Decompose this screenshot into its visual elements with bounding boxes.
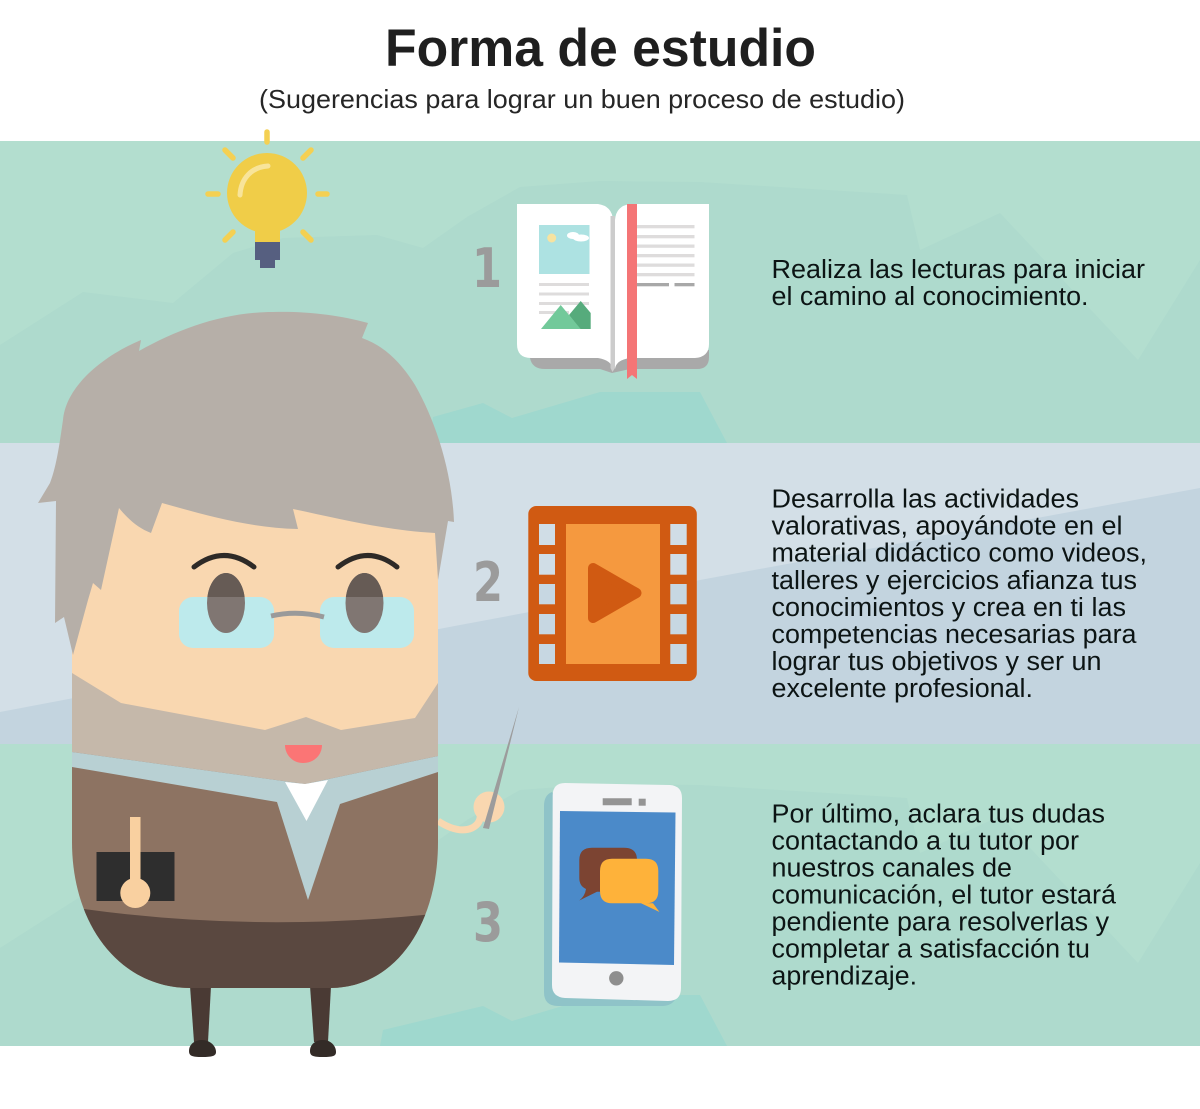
number 2: 2 xyxy=(473,551,503,614)
panel: band 1 background xyxy=(0,141,1200,443)
legs and shoes xyxy=(189,986,336,1057)
chat bubbles xyxy=(579,848,660,912)
trousers xyxy=(84,909,426,988)
text: step 3: Por último, aclara tus dudas xyxy=(772,800,1105,828)
arm holding pointer xyxy=(438,707,519,830)
text: step 3: aprendizaje. xyxy=(772,962,917,990)
number 1: 1 xyxy=(472,237,502,300)
text: step 3: nuestros canales de xyxy=(772,854,1012,882)
text: step 2: excelente profesional. xyxy=(772,675,1033,703)
text: step 2: material didáctico como videos, xyxy=(772,540,1147,568)
text: step 3: comunicación, el tutor estará xyxy=(772,882,1117,910)
text: step 3: contactando a tu tutor por xyxy=(772,828,1080,856)
pocket with arm xyxy=(96,817,174,908)
eyebrows xyxy=(194,556,397,567)
beard xyxy=(72,673,438,790)
text: step 3: pendiente para resolverlas y xyxy=(772,908,1109,936)
text: step 2 xyxy=(772,486,1147,703)
mouth xyxy=(285,745,322,763)
text: step 2: talleres y ejercicios afianza tus xyxy=(772,567,1137,595)
text: step 2: conocimientos y crea en ti las xyxy=(772,594,1126,622)
character: teacher xyxy=(38,312,519,1057)
panel: band 2 background xyxy=(0,443,1200,744)
vest xyxy=(72,752,438,1000)
panel: band 3 background xyxy=(0,744,1200,1046)
text: step 2: lograr tus objetivos y ser un xyxy=(772,648,1102,676)
text: step 2: competencias necesarias para xyxy=(772,621,1137,649)
text: step 1 xyxy=(772,256,1146,311)
collar xyxy=(72,752,438,900)
icon: smartphone with chat xyxy=(544,783,682,1006)
subtitle: (Sugerencias para lograr un buen proceso de estudio) xyxy=(259,84,905,114)
title: Forma de estudio xyxy=(385,19,816,78)
text: step 3: completar a satisfacción tu xyxy=(772,936,1090,964)
body xyxy=(72,503,438,988)
text: step 3 xyxy=(772,800,1117,990)
shirt xyxy=(285,780,328,821)
icon: light bulb xyxy=(208,132,327,268)
text: step 1: Realiza las lecturas para iniciar xyxy=(772,256,1146,284)
face xyxy=(72,503,438,730)
icon: open book xyxy=(517,204,709,379)
hair xyxy=(38,312,454,655)
text: step 2: Desarrolla las actividades xyxy=(772,486,1079,514)
number 3: 3 xyxy=(473,891,503,954)
text: step 2: valorativas, apoyándote en el xyxy=(772,512,1122,540)
text: step 1: el camino al conocimiento. xyxy=(772,283,1088,311)
icon: film strip with play xyxy=(528,506,697,681)
glasses and eyes xyxy=(179,573,414,648)
